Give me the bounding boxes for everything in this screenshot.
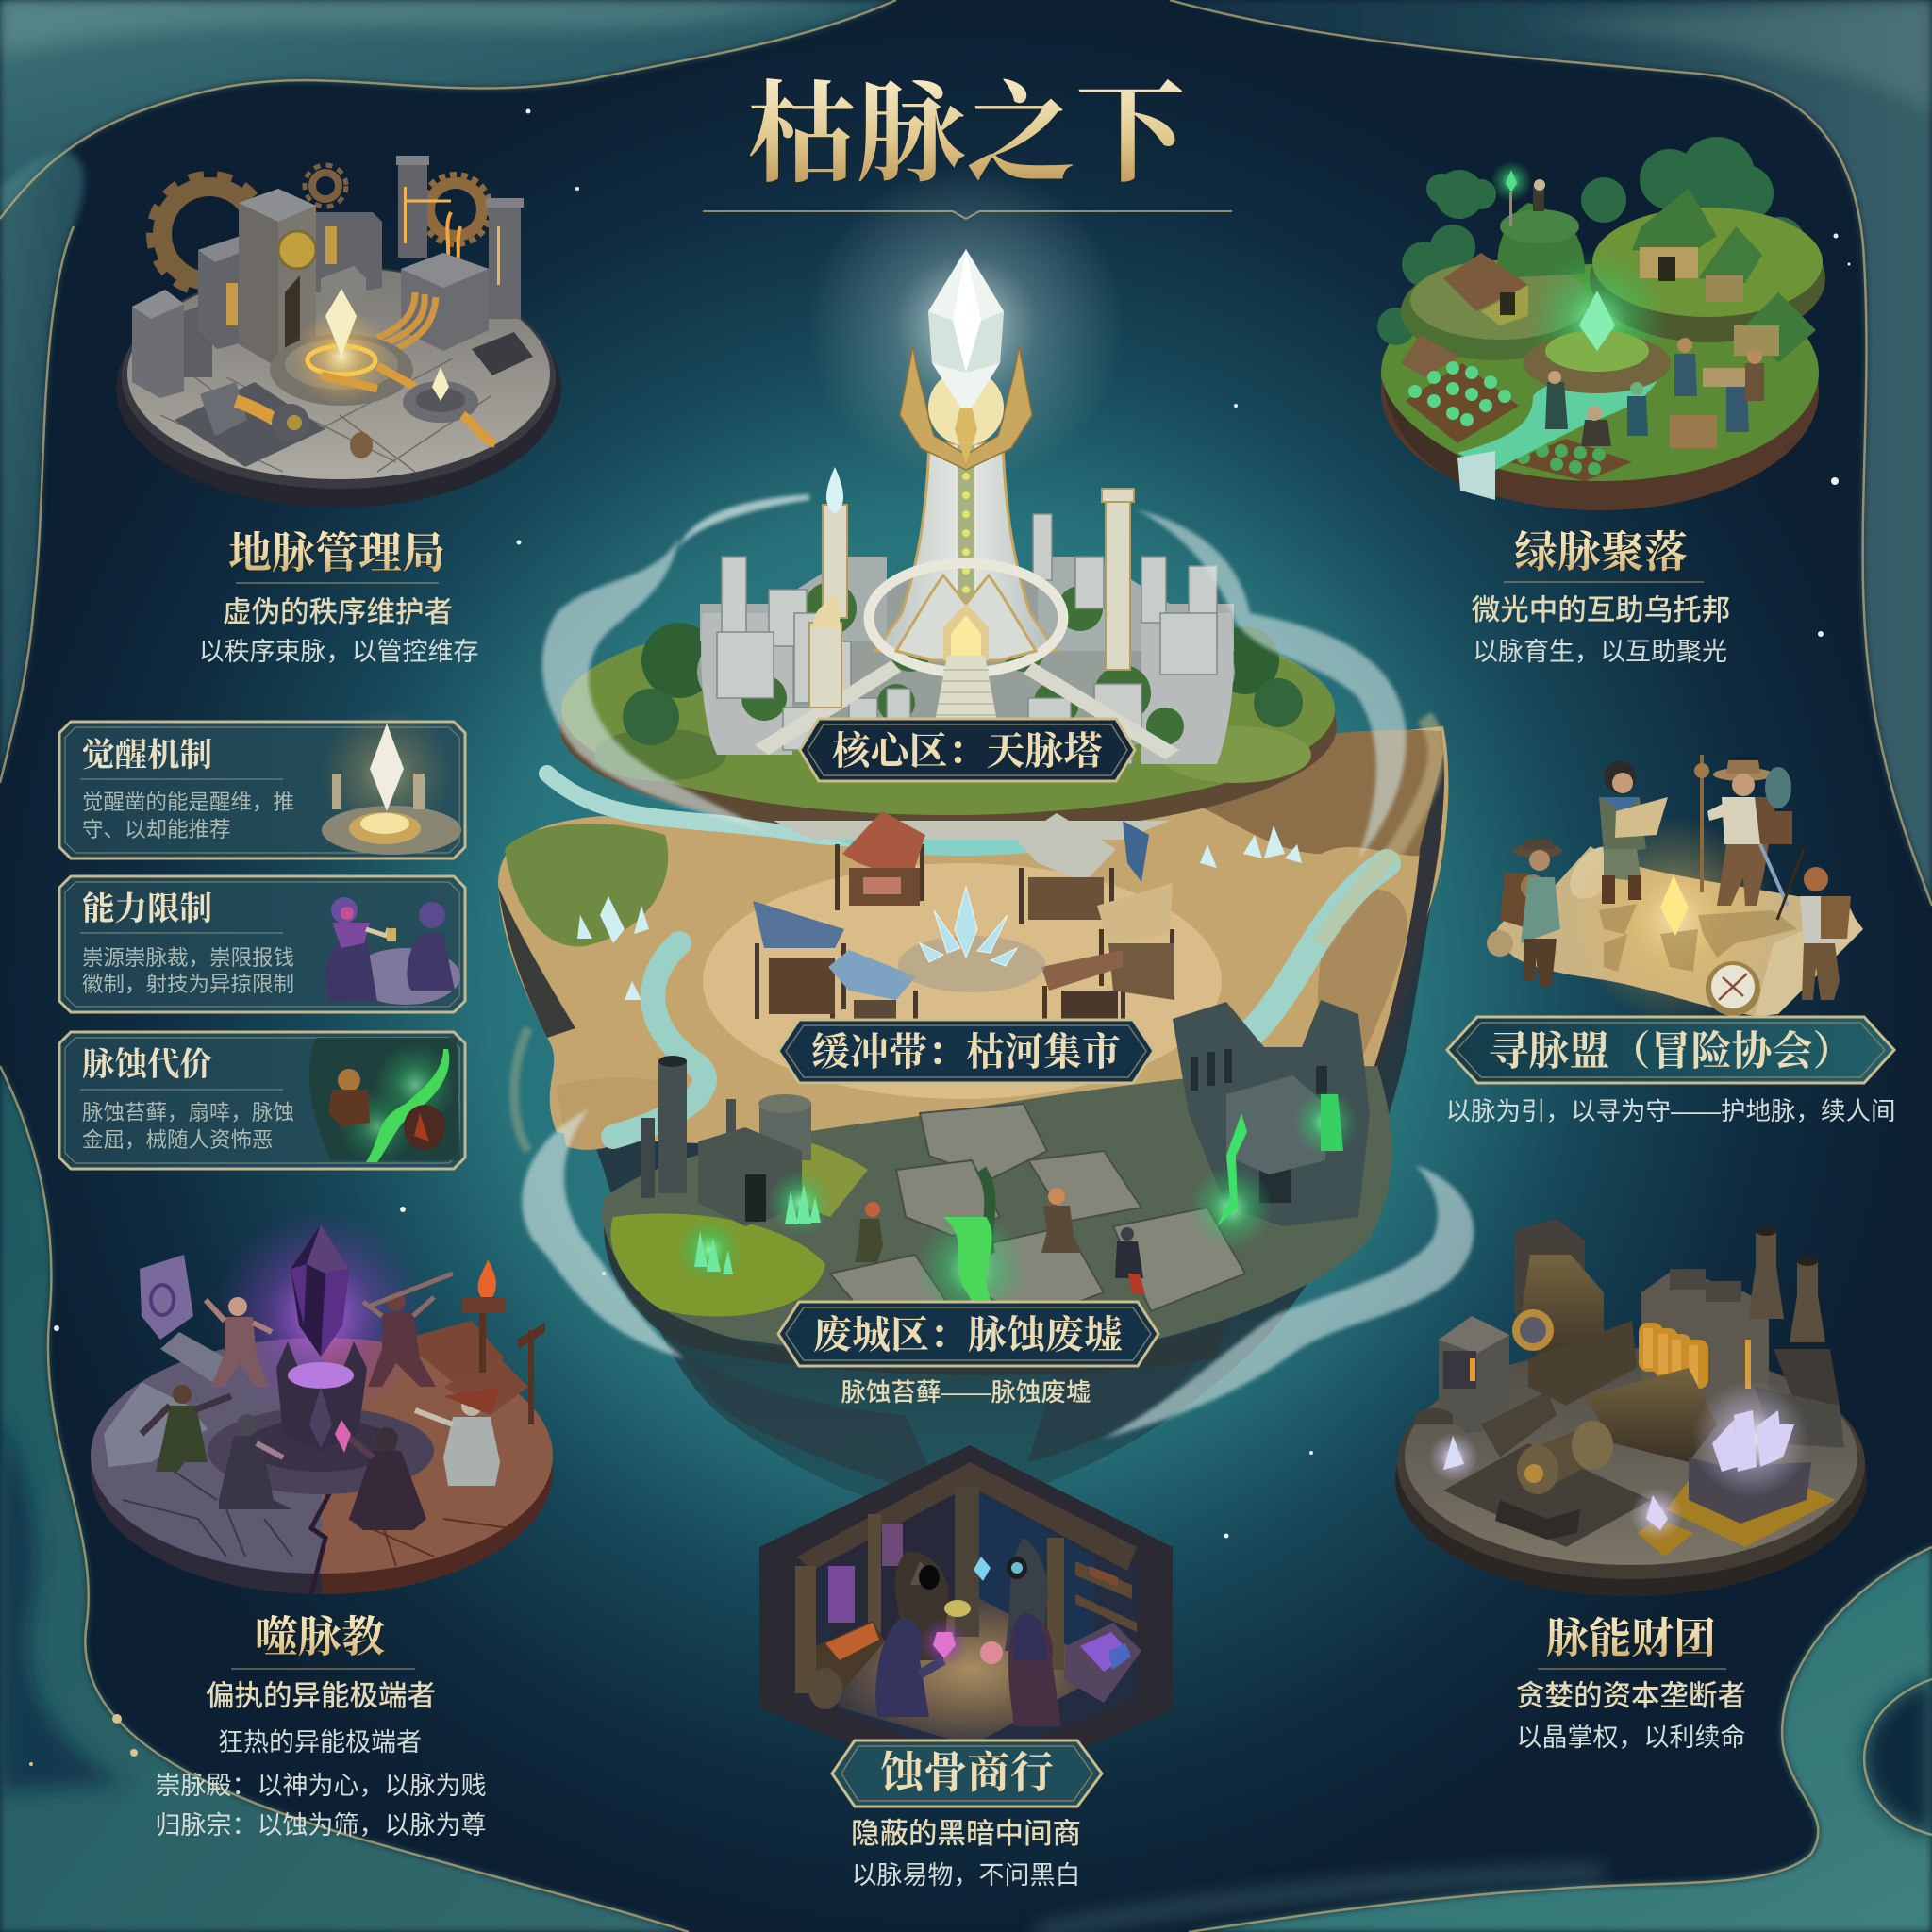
faction: 脉能财团 — [1395, 1219, 1867, 1752]
explorer with sword — [1760, 844, 1851, 1000]
tagline: 虚伪的秩序维护者 — [223, 596, 453, 628]
zone banner: core: 核心区：天脉塔 — [832, 729, 1102, 773]
zone banner: ruins — [778, 1302, 1158, 1366]
motto: 以脉易物，不问黑白 — [851, 1861, 1081, 1890]
faction: 地脉管理局 — [116, 156, 561, 666]
cabinet machine — [1415, 1316, 1509, 1434]
zone caption: 脉蚀苔藓——脉蚀废墟 — [841, 1378, 1091, 1407]
hooded traders — [875, 1538, 1061, 1726]
middle sand plateau — [498, 726, 1448, 1150]
panel: 脉蚀代价 — [59, 1032, 465, 1169]
panel illustration: crystal altar — [321, 708, 461, 855]
panel: 能力限制: 徽制，射技为异掠限制 — [82, 973, 294, 996]
banner: 寻脉盟（冒险协会） — [1489, 1029, 1853, 1074]
panel illustration: hooded figures — [325, 897, 460, 1005]
sect line 2: 归脉宗：以蚀为筛，以脉为尊 — [155, 1811, 487, 1840]
title: 枯脉之下: 枯脉之下 — [747, 75, 1186, 196]
goods crates — [808, 1561, 1141, 1709]
illustration: industrial disc — [1395, 1219, 1867, 1596]
panel: 能力限制 — [59, 876, 465, 1012]
furnace — [1639, 1269, 1769, 1415]
faction: 蚀骨商行 — [759, 1445, 1173, 1890]
factory ruins left — [641, 1056, 811, 1226]
gothic ruins right — [1173, 1000, 1370, 1250]
heading: 地脉管理局 — [228, 529, 445, 577]
banner: 蚀骨商行 — [880, 1749, 1054, 1797]
tagline: 微光中的互助乌托邦 — [1472, 594, 1730, 626]
motto: 以脉为引，以寻为守——护地脉，续人间 — [1445, 1097, 1896, 1125]
banner — [1447, 1017, 1894, 1083]
zone banner: buffer market — [778, 1020, 1154, 1083]
motto: 以晶掌权，以利续命 — [1517, 1724, 1745, 1752]
panel: 脉蚀代价: 金屈，械随人资怖恶 — [82, 1128, 274, 1152]
small crystals — [1429, 1433, 1693, 1557]
tagline: 贪婪的资本垄断者 — [1516, 1680, 1746, 1712]
ruined district — [602, 1000, 1391, 1375]
sect line 1: 崇脉殿：以神为心，以脉为贱 — [155, 1772, 487, 1800]
tagline: 偏执的异能极端者 — [206, 1680, 436, 1712]
bronze blocks — [1585, 1368, 1717, 1462]
motto: 以脉育生，以互助聚光 — [1473, 638, 1727, 666]
tagline: 隐蔽的黑暗中间商 — [851, 1818, 1081, 1850]
villagers — [1545, 338, 1764, 448]
figures in ruins — [855, 1188, 1145, 1294]
dark altar — [276, 1341, 367, 1451]
panel body: 崇源崇脉裁，崇限报钱 — [82, 946, 294, 970]
market stalls — [577, 811, 1302, 1028]
illustration: cult altar duel — [91, 1208, 553, 1594]
chimneys — [1748, 1226, 1840, 1406]
heading: 噬脉教 — [255, 1613, 385, 1661]
market crystal cluster — [920, 887, 1017, 966]
panel heading: 能力限制 — [82, 891, 212, 927]
heading: 绿脉聚落 — [1514, 528, 1688, 576]
tall machine — [1512, 1219, 1637, 1406]
faction: 寻脉盟 — [1445, 755, 1896, 1125]
panel body: 觉醒凿的能是醒维，推 — [82, 791, 294, 814]
machine with brass roller — [175, 382, 325, 467]
central floating island — [498, 165, 1474, 1511]
motto: 以秩序束脉，以管控维存 — [198, 638, 479, 666]
panel: 觉醒机制: 守、以却能推荐 — [82, 818, 231, 841]
background stars — [54, 109, 1851, 1538]
glowing fields — [1406, 363, 1519, 443]
zone banner: core — [800, 719, 1135, 781]
panel illustration: corroded crack — [309, 1038, 460, 1165]
illustration: adventurers on map — [1487, 755, 1863, 1024]
panel: 觉醒机制 — [59, 708, 465, 858]
faction: 噬脉教 — [91, 1208, 553, 1840]
explorer with map — [1599, 761, 1668, 904]
dark crystal — [291, 1224, 349, 1357]
zone banner: buffer market: 缓冲带：枯河集市 — [811, 1030, 1121, 1074]
core city walls and buildings — [697, 467, 1235, 766]
illustration: green terraced village — [1377, 137, 1825, 510]
main crystal — [928, 249, 1004, 408]
panel heading: 脉蚀代价 — [82, 1047, 212, 1083]
illustration: gears and stone disc — [116, 156, 561, 508]
title: 枯脉之下 — [703, 75, 1232, 219]
illustration: black market shop — [759, 1445, 1173, 1769]
crystal crate — [1666, 1380, 1835, 1547]
faction: 绿脉聚落 — [1377, 137, 1825, 666]
explorer with staff — [1694, 755, 1792, 906]
banner and torches — [140, 1255, 545, 1424]
motto: 狂热的异能极端者 — [218, 1728, 422, 1757]
glowing moss crystals — [676, 1170, 833, 1283]
zone banner: ruins: 废城区：脉蚀废墟 — [813, 1313, 1123, 1357]
explorer with backpack — [1500, 840, 1562, 986]
island underside rock — [498, 830, 1443, 1511]
compass — [1706, 961, 1760, 1016]
cylinder — [1481, 1391, 1613, 1540]
heading: 脉能财团 — [1546, 1615, 1716, 1662]
water wisps around island — [514, 494, 1474, 1439]
river and water — [547, 774, 1387, 1137]
panel body: 脉蚀苔藓，扇啈，脉蚀 — [82, 1101, 294, 1124]
cultists — [142, 1274, 500, 1530]
glow behind main crystal — [806, 165, 1126, 486]
upper green island — [559, 604, 1337, 840]
banner — [832, 1740, 1102, 1807]
panel heading: 觉醒机制 — [82, 738, 212, 774]
sky vein tower — [869, 345, 1063, 726]
